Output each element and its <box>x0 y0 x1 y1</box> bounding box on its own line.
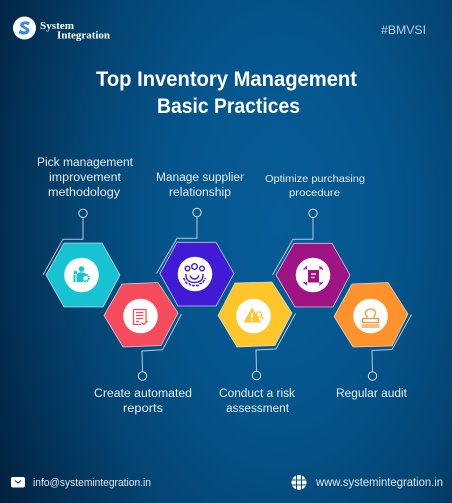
label: Optimize purchasing procedure: procedure <box>289 187 340 199</box>
website address: www.systemintegration.in <box>315 477 443 489</box>
label: Manage supplier relationship <box>156 172 244 199</box>
label: Optimize purchasing procedure: Optimize purchasing <box>265 173 365 185</box>
label: Pick management improvement methodology <box>37 157 134 199</box>
label: Create automated reports: reports <box>123 403 163 415</box>
connector: step 1 <box>43 209 87 275</box>
email address: info@systemintegration.in <box>33 477 151 489</box>
label: Conduct a risk assessment: assessment <box>226 403 290 415</box>
title: Top Inventory Management <box>96 68 357 91</box>
label: Pick management improvement methodology: improvement <box>49 172 122 184</box>
title <box>96 68 357 118</box>
hexagon: orange, stamp <box>334 282 408 347</box>
label: Create automated reports <box>94 388 192 415</box>
label: Manage supplier relationship: relationship <box>169 187 231 199</box>
hexagon: magenta, purchase document <box>276 243 350 307</box>
hexagon: red, report with check <box>104 282 178 347</box>
logo: System Integration: System <box>40 20 74 32</box>
connector: step 3 <box>156 208 201 274</box>
label: Manage supplier relationship: Manage supplier <box>156 172 244 184</box>
connector: step 5 <box>272 209 317 275</box>
icon: envelope <box>11 477 25 488</box>
hexagon: purple, team with gear <box>160 242 234 306</box>
connector: step 4 <box>252 314 296 380</box>
label: Conduct a risk assessment <box>219 388 295 415</box>
hexagon: yellow, risk warning triangle <box>218 282 292 347</box>
title: Basic Practices <box>157 95 300 118</box>
label: Create automated reports: Create automated <box>94 388 192 400</box>
label: Pick management improvement methodology: Pick management <box>37 157 134 169</box>
label: Conduct a risk assessment: Conduct a risk <box>219 388 295 400</box>
label: Pick management improvement methodology: methodology <box>48 187 120 199</box>
connector: step 2 <box>138 314 182 380</box>
logo: System Integration <box>13 16 110 42</box>
logo: System Integration: Integration <box>57 30 110 42</box>
hexagon: teal, people with gear <box>46 243 120 307</box>
label: Optimize purchasing procedure <box>265 173 365 199</box>
hashtag: #BMVSI <box>381 25 426 37</box>
connector: step 6 <box>368 314 412 380</box>
label: Regular audit: Regular audit <box>336 388 408 400</box>
icon: globe <box>292 475 306 490</box>
